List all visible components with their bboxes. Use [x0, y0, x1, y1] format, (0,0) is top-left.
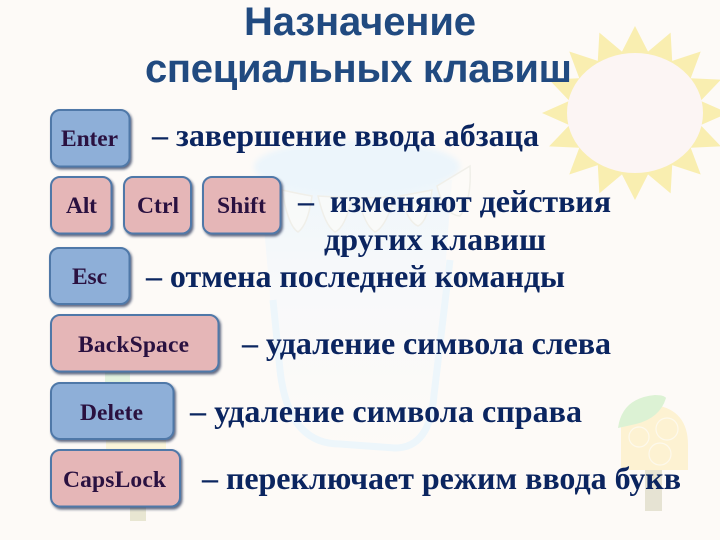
title: Назначение: [244, 0, 476, 44]
key: Shift: Shift: [217, 193, 266, 219]
key: Shift: [203, 177, 280, 234]
background illustration: right tree: [618, 395, 688, 511]
description: modifier keys: – изменяют действия: [297, 183, 611, 219]
description: Enter: – завершение ввода абзаца: [151, 117, 539, 153]
key: Esc: [50, 248, 130, 304]
key: CapsLock: [51, 450, 180, 506]
key: Ctrl: [124, 177, 191, 234]
background illustration: sun: [542, 26, 720, 200]
description: BackSpace: – удаление символа слева: [241, 325, 611, 361]
key: CapsLock: CapsLock: [63, 467, 167, 493]
title: [145, 0, 572, 91]
description: modifier keys: [297, 183, 611, 257]
key: Delete: Delete: [80, 400, 143, 426]
background illustration: left tree: [105, 372, 166, 521]
key: BackSpace: [51, 315, 218, 372]
description: CapsLock: – переключает режим ввода букв: [201, 460, 681, 496]
bunting on glass rim: [282, 166, 470, 232]
key: Esc: Esc: [72, 264, 107, 290]
title: специальных клавиш: [145, 47, 572, 91]
key: BackSpace: BackSpace: [78, 332, 189, 358]
description: Delete: – удаление символа справа: [189, 393, 582, 429]
description: Esc: – отмена последней команды: [145, 258, 565, 294]
key: Enter: Enter: [61, 126, 118, 152]
key: Ctrl: Ctrl: [137, 193, 179, 219]
key: Delete: [51, 383, 174, 439]
description: modifier keys: других клавиш: [324, 221, 546, 257]
key: Alt: Alt: [66, 193, 97, 219]
key: Alt: [51, 177, 112, 234]
background illustration: glass: [254, 140, 470, 450]
key: Enter: [51, 110, 130, 166]
